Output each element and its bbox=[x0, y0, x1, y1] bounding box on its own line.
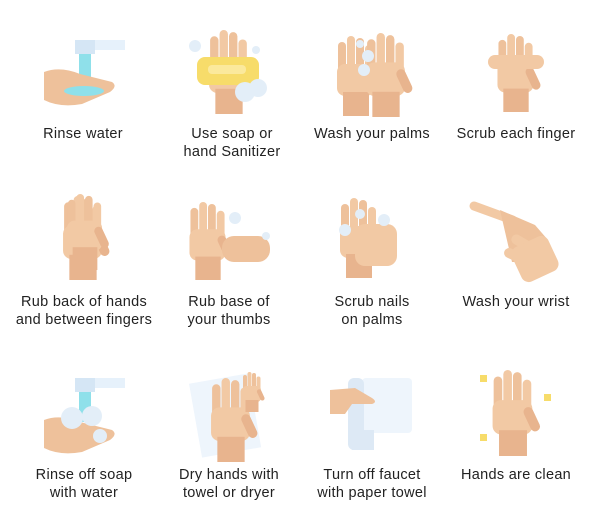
icon: thumbs bbox=[189, 202, 270, 280]
label: nails: on palms bbox=[341, 312, 403, 328]
icon: dry hands bbox=[189, 372, 265, 462]
label: rinse soap: Rinse off soap bbox=[36, 467, 132, 483]
label: back of hands: and between fingers bbox=[16, 312, 152, 328]
label: dry: towel or dryer bbox=[183, 485, 275, 501]
label: wrist: Wash your wrist bbox=[462, 294, 570, 310]
icon: soap bbox=[189, 30, 267, 114]
label: nails: Scrub nails bbox=[334, 294, 410, 310]
label: back of hands bbox=[16, 294, 152, 328]
label: dry: Dry hands with bbox=[179, 467, 279, 483]
icon: turn off faucet bbox=[330, 378, 412, 450]
label: faucet: Turn off faucet bbox=[323, 467, 421, 483]
label: faucet: with paper towel bbox=[317, 485, 427, 501]
label: nails bbox=[334, 294, 410, 328]
label: thumbs: Rub base of bbox=[188, 294, 270, 310]
label: rinse water: Rinse water bbox=[43, 126, 123, 142]
icon: nails bbox=[339, 198, 397, 278]
label: clean: Hands are clean bbox=[461, 467, 571, 483]
icon: fingers bbox=[488, 34, 544, 112]
label: soap: Use soap or bbox=[191, 126, 273, 142]
label: rinse soap bbox=[36, 467, 132, 501]
icon: clean hand bbox=[480, 370, 551, 456]
label: thumbs bbox=[187, 294, 271, 328]
icon: rinse water bbox=[44, 40, 125, 105]
icon: palms bbox=[337, 33, 414, 117]
label: back of hands: Rub back of hands bbox=[21, 294, 147, 310]
label: palms: Wash your palms bbox=[314, 126, 430, 142]
label: dry bbox=[179, 467, 279, 501]
icon: rinse soap bbox=[44, 378, 125, 453]
label: fingers: Scrub each finger bbox=[457, 126, 575, 142]
icon: wrist bbox=[468, 200, 561, 285]
label: soap bbox=[184, 126, 280, 160]
label: soap: hand Sanitizer bbox=[184, 144, 280, 160]
label: faucet bbox=[317, 467, 427, 501]
label: rinse soap: with water bbox=[50, 485, 118, 501]
icon: back of hands bbox=[63, 194, 111, 280]
label: thumbs: your thumbs bbox=[187, 312, 271, 328]
